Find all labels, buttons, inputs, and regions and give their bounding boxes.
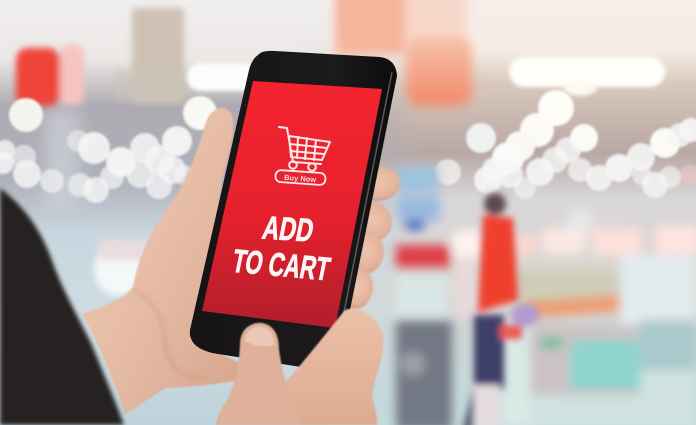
phone body xyxy=(190,51,397,370)
buy now button: Buy Now xyxy=(284,173,317,184)
ceiling column xyxy=(132,8,184,103)
add to cart text xyxy=(229,209,333,287)
thumbnail xyxy=(245,327,274,346)
palm crease shadow xyxy=(135,290,205,378)
left hand holding phone xyxy=(82,108,402,414)
screen xyxy=(202,81,382,328)
long ceiling lights xyxy=(187,57,665,96)
phone xyxy=(190,51,397,370)
add to cart text: TO CART xyxy=(229,242,333,287)
palm and thumb xyxy=(82,108,240,414)
bokeh lights xyxy=(0,90,696,203)
sleeve: dark jacket xyxy=(0,188,124,425)
fingers wrapping phone xyxy=(336,164,402,311)
pressing thumb xyxy=(218,323,300,425)
buy now button xyxy=(275,170,326,185)
lower fingers and hand xyxy=(216,309,383,425)
blurred shopper xyxy=(462,193,539,425)
orange hanging signs xyxy=(335,0,472,106)
red hanging sign left xyxy=(16,45,84,106)
add to cart text: ADD xyxy=(260,209,317,248)
right hand pressing phone xyxy=(216,309,383,425)
icon: shopping cart xyxy=(279,127,330,171)
store shelves right of phone xyxy=(396,167,696,425)
left column xyxy=(45,110,80,210)
edge highlight xyxy=(342,72,392,322)
lower left white glow xyxy=(94,244,142,296)
